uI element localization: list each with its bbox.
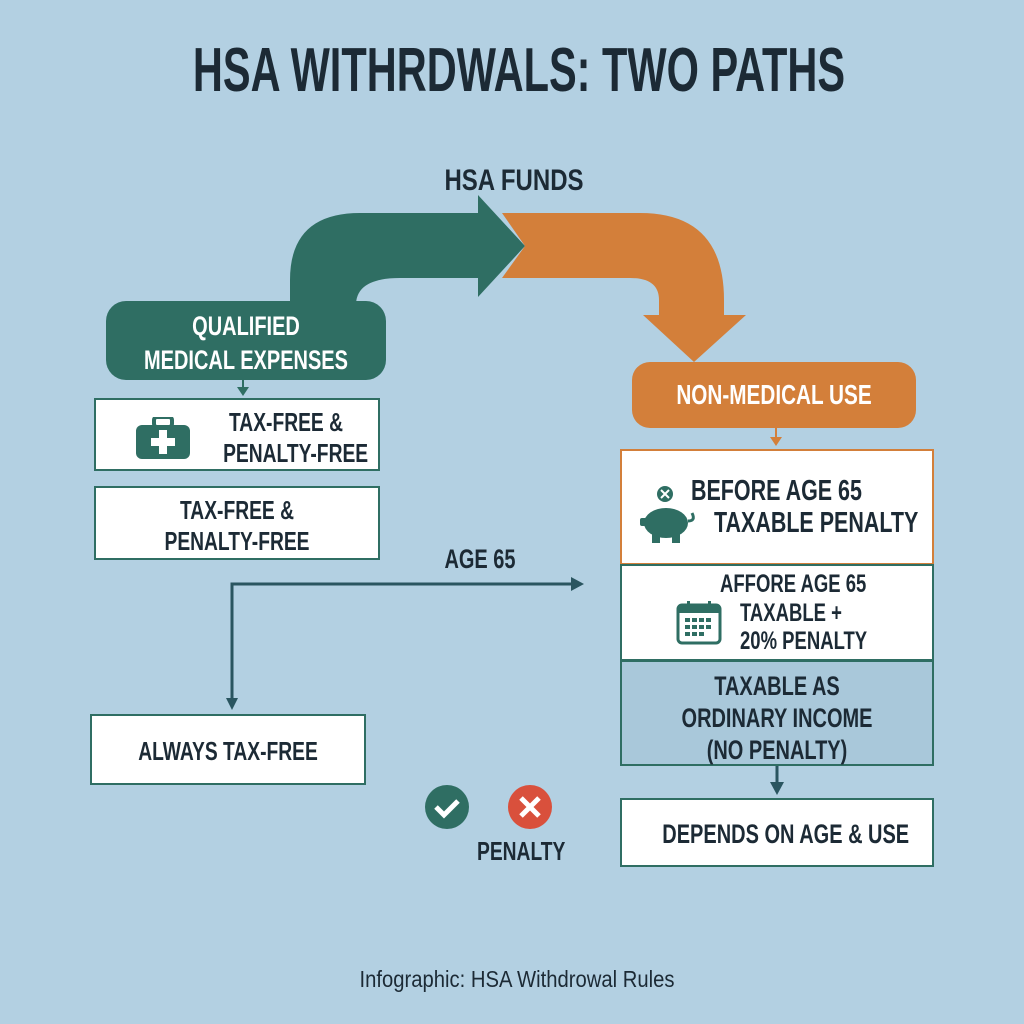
box: before age 65: [620, 449, 934, 565]
box: non-medical use: NON-MEDICAL USE: [676, 379, 872, 410]
icon: piggy bank: [640, 486, 695, 543]
box: qualified medical expenses: QUALIFIED: [192, 311, 300, 341]
legend: check and x: [425, 785, 565, 866]
arrow: green qualified: [290, 195, 525, 305]
box: tax-free & penalty-free with icon: TAX-FREE &: [229, 407, 343, 437]
arrow: age 65 line: [226, 577, 784, 795]
box: tax-free & penalty-free: TAX-FREE &: [180, 495, 294, 525]
box: taxable as ordinary income: ORDINARY INCOME: [682, 703, 872, 733]
box: qualified medical expenses: MEDICAL EXPENSES: [144, 345, 348, 375]
box: depends on age & use: DEPENDS ON AGE & USE: [662, 819, 909, 849]
box: before age 65: TAXABLE PENALTY: [714, 507, 918, 539]
box: always tax-free: ALWAYS TAX-FREE: [138, 736, 318, 766]
icon: check: [425, 785, 469, 829]
box: taxable as ordinary income: (NO PENALTY): [707, 735, 847, 765]
box: taxable as ordinary income: [620, 660, 934, 766]
arrow: orange non-medical: [502, 213, 746, 362]
box: depends on age & use: [620, 798, 934, 867]
box: tax-free & penalty-free: PENALTY-FREE: [164, 526, 310, 556]
box: before age 65: BEFORE AGE 65: [691, 475, 862, 507]
box: non-medical use: [632, 362, 916, 428]
title: HSA WITHRDWALS: TWO PATHS: [193, 36, 845, 105]
box: tax-free & penalty-free: [94, 486, 380, 560]
box: tax-free & penalty-free with icon: PENALTY-FREE: [223, 438, 368, 468]
box: affore age 65: TAXABLE +: [740, 599, 842, 627]
box: affore age 65: [620, 564, 934, 661]
box: affore age 65: AFFORE AGE 65: [720, 570, 866, 598]
box: qualified medical expenses: [106, 301, 386, 380]
icon: calendar: [676, 601, 722, 644]
icon: medical kit: [136, 417, 190, 459]
label: penalty: PENALTY: [477, 836, 565, 866]
box: taxable as ordinary income: TAXABLE AS: [714, 671, 840, 701]
icon: cross: [508, 785, 552, 829]
label: age 65: AGE 65: [444, 544, 516, 574]
box: always tax-free: [90, 714, 366, 785]
footer: Infographic: HSA Withdrowal Rules: [360, 966, 674, 992]
connector arrows: [237, 378, 782, 446]
box: tax-free & penalty-free with icon: [94, 398, 380, 471]
box: affore age 65: 20% PENALTY: [740, 627, 867, 655]
label: HSA funds: HSA FUNDS: [444, 164, 584, 197]
